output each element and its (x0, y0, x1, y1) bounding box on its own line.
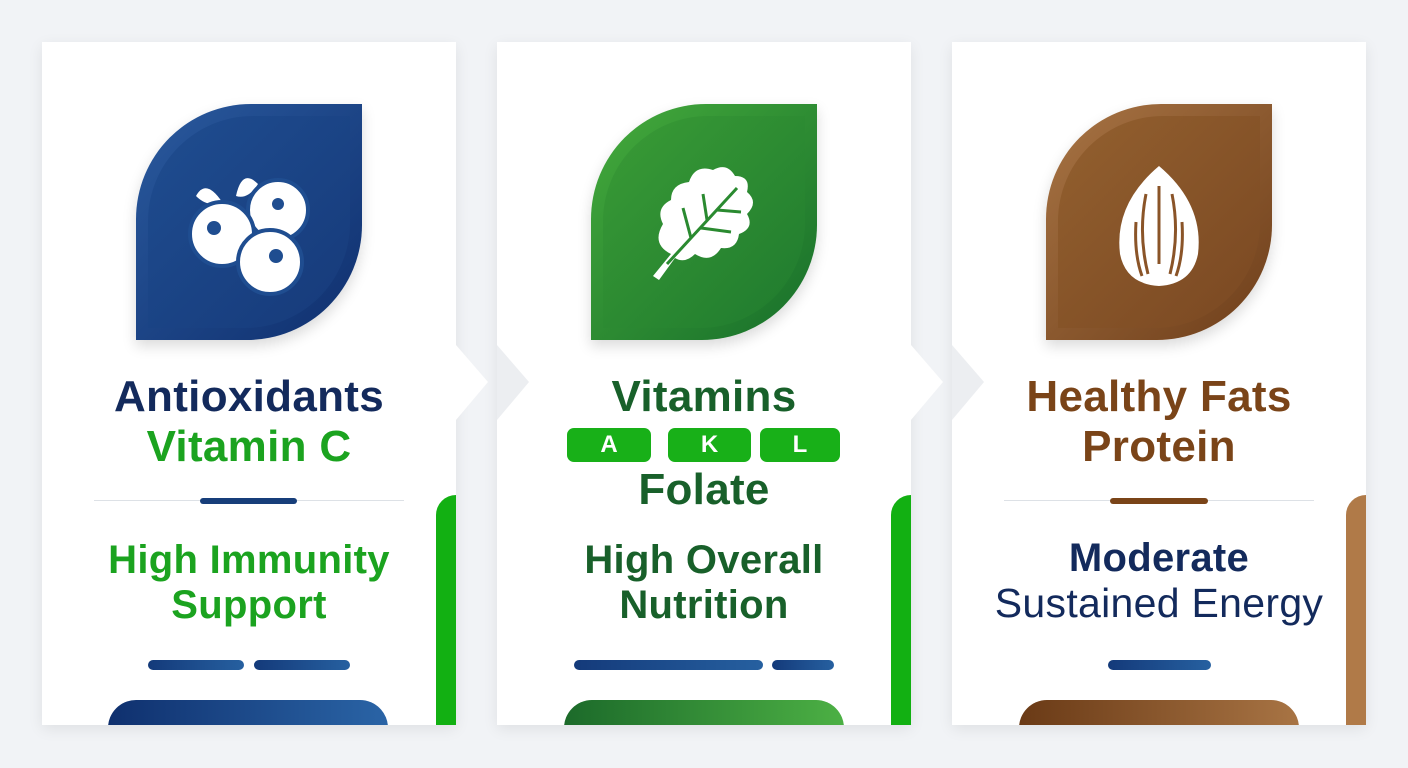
text: benefit: Support (171, 583, 327, 627)
panel: vitamins (497, 42, 911, 725)
text: benefit: High Immunity (108, 538, 390, 582)
text: benefit: High Overall (584, 538, 824, 582)
panel: healthy fats (952, 42, 1366, 725)
rating pills (574, 660, 834, 670)
badges: A K L: L (793, 431, 807, 458)
panel: antioxidants (42, 42, 456, 725)
text: benefit: Sustained Energy (995, 580, 1323, 626)
heading: vitamins: Vitamins (612, 372, 796, 421)
text: benefit (995, 536, 1323, 626)
badges: A K L: A (600, 431, 618, 458)
heading: healthy fats: Healthy Fats (1026, 372, 1292, 421)
icon: almond (1046, 104, 1272, 340)
badges: A K L (567, 428, 840, 462)
text: benefit (108, 538, 390, 627)
badges: A K L: K (701, 431, 718, 458)
text: benefit: Nutrition (619, 583, 789, 627)
rating pill (1108, 660, 1211, 670)
heading: folate: Folate (638, 465, 770, 514)
rating pills (148, 660, 350, 670)
text: benefit (584, 538, 824, 627)
heading: antioxidants: Antioxidants (114, 372, 384, 421)
heading: vitamin c: Vitamin C (147, 422, 351, 471)
icon: blueberries (136, 104, 362, 340)
icon: leafy greens (591, 104, 817, 340)
heading: protein: Protein (1082, 422, 1236, 471)
text: benefit: Moderate (1069, 536, 1249, 580)
